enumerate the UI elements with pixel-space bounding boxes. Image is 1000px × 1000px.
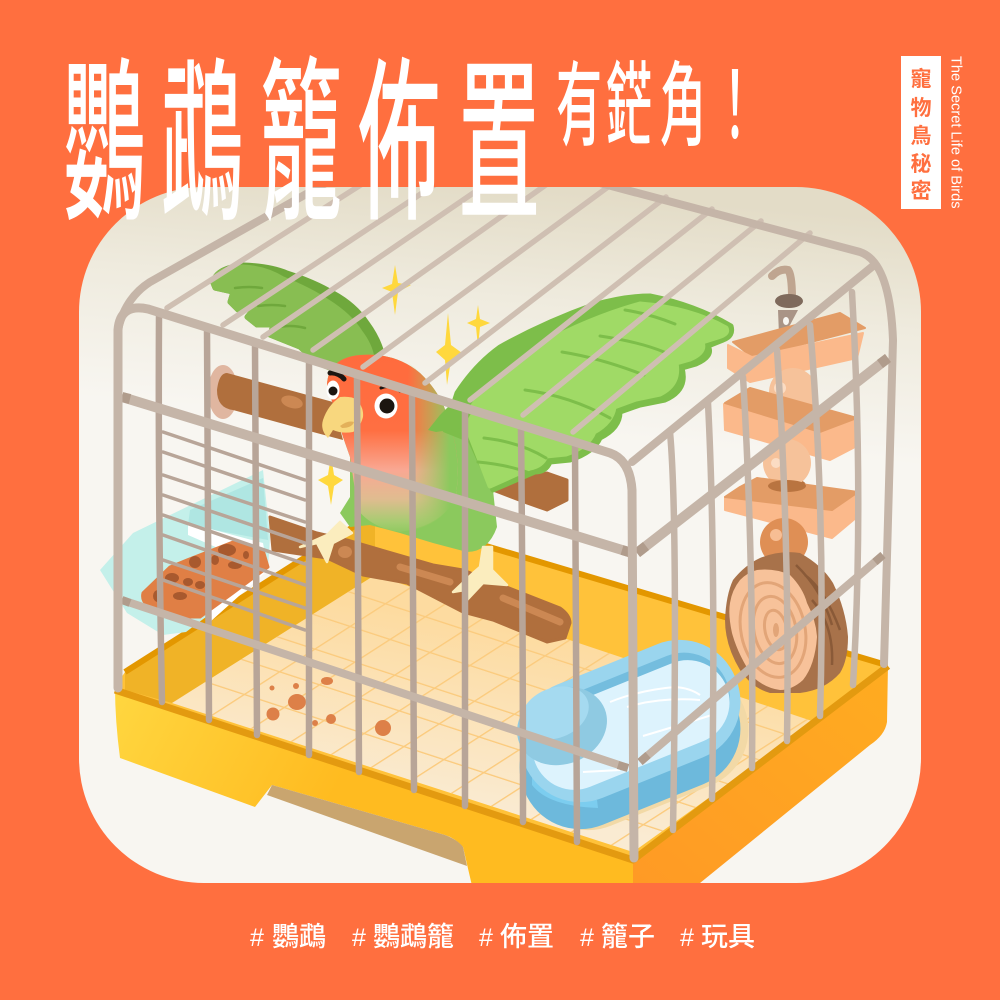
cage tray: [115, 513, 888, 890]
front bars: [159, 315, 577, 842]
bark grain: [796, 565, 840, 665]
wing body: [464, 304, 727, 486]
hashtags: 鸚鵡籠: [373, 922, 454, 952]
subtitle: [556, 32, 758, 165]
wing body: [213, 267, 372, 363]
perch branch: [217, 373, 343, 440]
eye white: [374, 394, 398, 418]
bead shadow: [768, 480, 806, 492]
wing edge: [445, 296, 732, 490]
title: 置: [458, 3, 540, 256]
title: 鵡: [161, 3, 243, 256]
lower cross bars: [122, 555, 883, 768]
logo badge: [901, 56, 941, 209]
tray front face: [115, 687, 633, 890]
upper cross bars: [122, 358, 888, 553]
pupil: [328, 386, 338, 396]
cup white opening: [188, 523, 268, 622]
subtitle: ！: [712, 32, 758, 165]
subtitle: 鋩: [606, 32, 652, 165]
head and chest colour: [327, 355, 458, 532]
title: 鸚: [63, 3, 145, 256]
hashtags: 籠子: [601, 922, 655, 952]
right side bars: [670, 292, 858, 830]
beak shade: [340, 422, 354, 428]
hook: [772, 270, 792, 298]
cage frame front: [118, 308, 634, 858]
wing edge: [213, 265, 382, 372]
wing shoulder: [428, 395, 472, 432]
block 3: [725, 478, 858, 538]
hook ring: [775, 294, 803, 308]
hanging toy: [724, 270, 865, 693]
brow: [330, 373, 344, 379]
bead highlight: [770, 529, 782, 541]
title: [63, 3, 540, 256]
right foot: [453, 547, 507, 600]
badge text: 物: [910, 97, 932, 120]
hashtags: #: [680, 924, 694, 952]
body: [327, 355, 497, 552]
cage mat: [172, 575, 815, 852]
cup translucent: [100, 470, 270, 635]
front rim: [115, 666, 888, 860]
badge text: [910, 68, 932, 203]
tray rim: [125, 513, 883, 672]
bead body: [769, 368, 817, 416]
block front: [724, 404, 857, 460]
hashtags: 鸚鵡: [272, 922, 326, 952]
bead 1: [769, 368, 817, 420]
bowl spout shade: [505, 674, 619, 778]
badge text: 秘: [910, 153, 932, 176]
seed food: [143, 542, 268, 617]
perch highlight: [281, 396, 303, 408]
cage frame back: [118, 175, 893, 664]
floor shade: [125, 513, 375, 703]
back-left perch with wall mount: [208, 365, 343, 440]
bead highlight: [774, 382, 786, 394]
side green blend: [410, 365, 458, 522]
disc face: [729, 570, 817, 690]
beak shape: [322, 397, 363, 438]
brow: [381, 387, 400, 391]
bead body: [763, 439, 811, 487]
tray floor: [115, 513, 886, 858]
bowl shadow: [509, 650, 767, 848]
beak: [322, 397, 363, 438]
hook link: [778, 310, 798, 335]
block front: [728, 333, 863, 382]
illustration: bird cage: [100, 139, 893, 890]
block 2: [724, 388, 857, 460]
perch mount: [210, 365, 234, 419]
hook hole: [783, 317, 789, 325]
panel: beige backdrop: [79, 187, 921, 883]
block 1: [728, 313, 865, 382]
block top: [725, 478, 858, 510]
sparkles: [318, 265, 490, 505]
cage wires: [118, 139, 893, 858]
hashtags: [250, 922, 755, 952]
disc rings: [732, 576, 814, 684]
cage mat grid: [172, 575, 815, 852]
main perch: [270, 517, 570, 642]
sparkle 4: [318, 455, 343, 505]
sparkle 1: [382, 265, 411, 315]
bead 3: [760, 518, 808, 566]
parrot: [213, 265, 732, 600]
badge text: 密: [910, 179, 932, 203]
bar joints: [122, 358, 888, 768]
hashtags: #: [479, 924, 493, 952]
disc core: [773, 623, 779, 637]
perch highlights: [400, 567, 560, 622]
badge box: [901, 56, 941, 209]
subtitle: 有: [556, 32, 602, 165]
sparkle 3: [467, 305, 490, 347]
top wires: [167, 139, 810, 432]
bead body: [760, 518, 808, 566]
left foot: [300, 522, 352, 562]
back wing: [213, 265, 382, 372]
cup inner: [188, 478, 268, 540]
hashtags: 玩具: [701, 922, 755, 952]
sparkle 2: [436, 313, 462, 385]
tray right face: [633, 664, 888, 883]
perch knot: [338, 546, 352, 558]
seed spots: [153, 544, 249, 602]
hashtags: #: [352, 924, 366, 952]
bead highlight: [771, 458, 781, 468]
disc bark: [725, 552, 848, 693]
eye white: [326, 380, 340, 400]
badge text: 鳥: [910, 125, 932, 148]
bowl side: [501, 649, 759, 847]
hashtags: #: [250, 924, 264, 952]
water bowl: [501, 622, 767, 848]
badge text: 寵: [910, 68, 932, 91]
back-right perch stub: [493, 473, 567, 510]
hashtags: 佈置: [500, 922, 554, 952]
water: [520, 647, 742, 803]
bead 2: [763, 439, 811, 492]
bead shadow: [768, 478, 806, 492]
bowl rim: [501, 622, 759, 820]
title: 籠: [260, 3, 342, 256]
door slats: [163, 432, 305, 630]
brand line: The Secret Life of Birds: [948, 56, 964, 208]
water highlights: [583, 687, 712, 772]
wing feather lines: [235, 287, 305, 328]
bead shadow: [774, 406, 812, 420]
wood disc: [725, 552, 848, 693]
subtitle: 角: [660, 32, 706, 165]
block front: [725, 493, 858, 538]
bowl spout: [513, 677, 597, 749]
pupil: [380, 398, 394, 414]
title: 佈: [358, 3, 440, 256]
front wing: [428, 296, 732, 490]
bowl inner wall: [518, 639, 744, 801]
tray handle notch: [267, 785, 467, 866]
wing feather lines: [478, 310, 675, 474]
perch branch: [270, 517, 570, 642]
left eye: [326, 373, 344, 400]
block top: [733, 313, 865, 357]
droppings: [266, 677, 391, 736]
hashtags: #: [580, 924, 594, 952]
right eye: [374, 387, 400, 418]
bowl highlight: [532, 772, 598, 808]
food cup with seed: [100, 470, 270, 635]
block top: [725, 388, 857, 432]
